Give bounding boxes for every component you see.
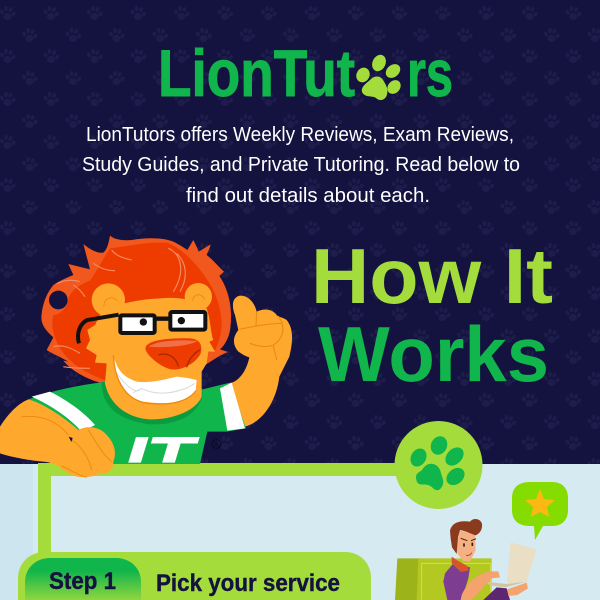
- green frame: [44, 470, 420, 560]
- registered mark: [212, 440, 221, 449]
- left arm: [0, 399, 115, 477]
- neck shadow on shirt: [102, 382, 202, 424]
- hand under laptop: [507, 583, 528, 596]
- body: [443, 563, 470, 600]
- step badge: Step 1: [49, 568, 116, 595]
- lion mascot: [0, 236, 292, 483]
- registered mark: R: [214, 443, 219, 449]
- ears: [92, 283, 212, 317]
- heading: How It Works: How It: [311, 232, 553, 320]
- lower pale blue panel: [0, 464, 600, 600]
- logo: LionTutors: rs: [407, 36, 453, 110]
- heading: How It Works: Works: [318, 310, 549, 398]
- hair: [450, 519, 482, 554]
- intro text: Study Guides, and Private Tutoring. Read below to: [82, 154, 520, 176]
- shirt stripes: [32, 392, 95, 432]
- heading: How It Works: [311, 232, 553, 398]
- icon: paw: [407, 434, 468, 490]
- smile: [113, 355, 197, 404]
- sofa: [395, 558, 492, 600]
- legs: [483, 587, 510, 600]
- laptop: [485, 542, 537, 587]
- intro text: [82, 124, 520, 207]
- step title: Pick your service: [156, 570, 340, 597]
- head: [453, 530, 476, 562]
- nose: [145, 338, 201, 369]
- icon: logo paw: [354, 53, 403, 100]
- intro text: find out details about each.: [186, 185, 430, 207]
- face: [461, 538, 476, 556]
- paw badge circle: [394, 421, 482, 509]
- mane: [41, 236, 231, 383]
- step badge: [25, 558, 141, 600]
- intro text: LionTutors offers Weekly Reviews, Exam Reviews,: [86, 124, 514, 146]
- head and neck: [86, 298, 215, 419]
- shirt: [28, 382, 246, 464]
- navy patterned background: [0, 0, 600, 465]
- icon: star: [525, 489, 555, 517]
- shirt letters IT: IT: [125, 428, 199, 483]
- collar: [452, 557, 469, 572]
- step bar: [18, 552, 371, 600]
- speech bubble with star: [512, 482, 568, 540]
- arm: [461, 571, 500, 600]
- mane curl hole: [49, 291, 68, 309]
- logo: LionTutors: LionTut: [158, 36, 355, 110]
- right arm and hand: [197, 296, 292, 427]
- person with laptop on sofa: [395, 519, 537, 600]
- glasses: [78, 312, 205, 343]
